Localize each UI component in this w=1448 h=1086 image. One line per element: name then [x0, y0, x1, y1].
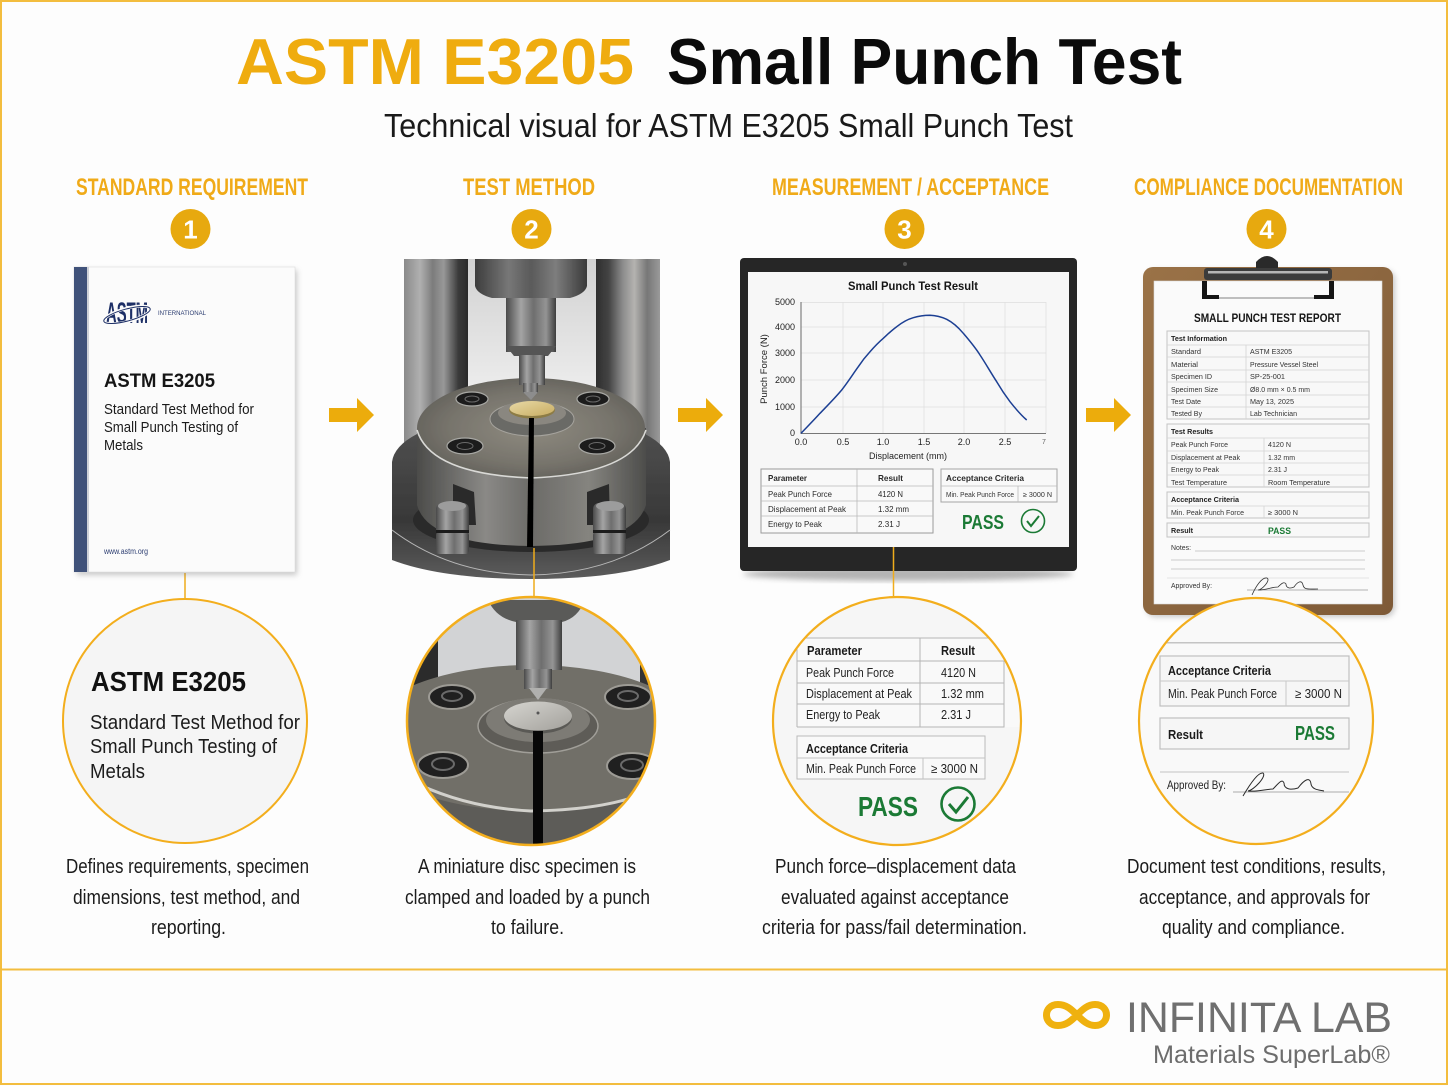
book: standard document: INTERNATIONAL [158, 310, 206, 317]
book: standard document: Standard Test Method for [104, 402, 254, 418]
result table: 1.32 mm [878, 504, 909, 514]
line chart: punch force vs displacement: 0.0 [795, 437, 807, 447]
result table: 2.31 J [878, 519, 900, 529]
zoomed approval signature: Approved By: [1167, 780, 1226, 792]
notes and approval: Approved By: [1171, 583, 1212, 590]
detail circle: standard title: Small Punch Testing of [90, 736, 277, 758]
table: test information: ASTM E3205 [1250, 349, 1292, 356]
line chart: punch force vs displacement: 1000 [775, 402, 795, 412]
book: standard document: ASTM E3205 [104, 371, 215, 392]
line chart: punch force vs displacement: 2.0 [958, 437, 970, 447]
table: test results: Room Temperature [1268, 480, 1330, 487]
table: test information: Standard [1171, 349, 1201, 356]
clamp body [417, 428, 646, 546]
notes and approval: Notes: [1171, 545, 1191, 552]
detail circle: standard title: Metals [90, 761, 145, 783]
line chart: punch force vs displacement: Displacement (mm) [869, 451, 947, 462]
zoomed result box: PASS [1295, 723, 1335, 745]
description 2 [405, 856, 650, 939]
zoomed result box [1160, 718, 1349, 749]
acceptance criteria table: Min. Peak Punch Force [946, 492, 1014, 499]
title: Small Punch Test [667, 25, 1182, 98]
zoomed acceptance table: ≥ 3000 N [931, 762, 978, 776]
connector line [184, 573, 186, 598]
description 1: Defines requirements, specimen [66, 856, 309, 878]
table: test results: Test Temperature [1171, 480, 1227, 487]
table: test information [1167, 331, 1369, 419]
table: test results: 1.32 mm [1268, 455, 1295, 462]
column 1: standard requirement [63, 174, 309, 939]
step number 1 [170, 209, 210, 249]
line chart: punch force vs displacement: 2000 [775, 375, 795, 385]
punch [475, 259, 587, 400]
connector line [533, 548, 535, 598]
chart title: Small Punch Test Result [848, 279, 978, 293]
detail circle: standard title: ASTM E3205 [91, 666, 246, 697]
table: test results: 4120 N [1268, 442, 1291, 449]
column 3: measurement and acceptance [740, 174, 1077, 939]
zoomed result box: Result [1168, 728, 1204, 742]
table: acceptance criteria [1167, 492, 1369, 518]
heading: standard requirement: STANDARD REQUIREMENT [76, 174, 308, 201]
line chart: punch force vs displacement: 2.5 [999, 437, 1011, 447]
zoomed acceptance table: Acceptance Criteria [1168, 664, 1272, 678]
zoomed acceptance table [797, 736, 985, 779]
zoomed result table: Displacement at Peak [806, 687, 913, 701]
description 1 [66, 856, 309, 939]
zoomed result table: 2.31 J [941, 708, 971, 722]
result table [761, 469, 933, 533]
description 2: to failure. [491, 917, 564, 939]
description 4: acceptance, and approvals for [1139, 887, 1370, 909]
zoomed acceptance table [1160, 656, 1349, 706]
acceptance criteria table: ≥ 3000 N [1023, 492, 1052, 499]
table: test information: SP-25-001 [1250, 374, 1285, 381]
description 4: quality and compliance. [1162, 917, 1345, 939]
monitor [740, 258, 1077, 581]
step number 2: 2 [524, 214, 539, 244]
description 4: Document test conditions, results, [1127, 856, 1386, 878]
description 3: criteria for pass/fail determination. [762, 917, 1027, 939]
table: result [1167, 523, 1369, 537]
step number 3: 3 [897, 214, 912, 244]
line chart: punch force vs displacement: Punch Force (N) [759, 334, 770, 404]
table: test information: Test Information [1171, 334, 1227, 343]
line chart: punch force vs displacement: 7 [1042, 439, 1046, 446]
description 1: dimensions, test method, and [73, 887, 300, 909]
table: test information: Lab Technician [1250, 411, 1297, 418]
detail circle: punch and specimen [406, 596, 656, 846]
zoomed acceptance table: Min. Peak Punch Force [1168, 687, 1277, 701]
line chart: punch force vs displacement: 0.5 [837, 437, 849, 447]
logo: Infinita Lab: Materials SuperLab® [1153, 1041, 1391, 1069]
table: test information: Specimen Size [1171, 387, 1218, 394]
table: test information: Material [1171, 362, 1198, 369]
description 3 [762, 856, 1027, 939]
zoomed result table: Peak Punch Force [806, 666, 894, 680]
title [236, 25, 1182, 98]
result table: Result [878, 473, 903, 483]
report title: SMALL PUNCH TEST REPORT [1194, 311, 1342, 325]
step number 4: 4 [1259, 214, 1274, 244]
column 2: test method [392, 178, 670, 934]
zoomed result table: Parameter [807, 644, 862, 658]
table: test results [1167, 424, 1369, 487]
table: test information: May 13, 2025 [1250, 399, 1294, 406]
description 3: evaluated against acceptance [781, 887, 1009, 909]
zoomed pass result [858, 788, 974, 822]
table: test results: Peak Punch Force [1171, 442, 1228, 449]
result table: Displacement at Peak [768, 504, 847, 514]
pass result with check icon [962, 510, 1044, 534]
line chart: punch force vs displacement: 1.5 [918, 437, 930, 447]
detail circle: standard title: Standard Test Method for [90, 712, 300, 734]
result table: Peak Punch Force [768, 489, 832, 499]
table: test information: Tested By [1171, 411, 1202, 418]
pass result with check icon: PASS [962, 512, 1004, 534]
table: acceptance criteria: Acceptance Criteria [1171, 495, 1240, 504]
table: test results: Displacement at Peak [1171, 455, 1241, 462]
line chart: punch force vs displacement: 0 [790, 428, 795, 438]
result table: Energy to Peak [768, 519, 823, 529]
zoomed pass result: PASS [858, 791, 918, 822]
book: standard document: Small Punch Testing of [104, 420, 239, 436]
test fixture photo illustration [392, 259, 670, 579]
book: standard document: www.astm.org [103, 547, 148, 556]
arrow 1 [329, 398, 374, 432]
acceptance criteria table [941, 469, 1057, 502]
line chart: punch force vs displacement: 1.0 [877, 437, 889, 447]
notes and approval [1167, 545, 1369, 595]
step number 2 [512, 209, 552, 249]
table: test information: Specimen ID [1171, 374, 1212, 381]
book: standard document [74, 267, 297, 575]
subtitle: Technical visual for ASTM E3205 Small Punch Test [384, 107, 1073, 144]
table: result: PASS [1268, 526, 1291, 536]
result table: Parameter [768, 473, 808, 483]
icon: ASTM logo [102, 297, 152, 330]
table: test information: Pressure Vessel Steel [1250, 362, 1318, 369]
table: test results: Test Results [1171, 427, 1213, 436]
heading: measurement / acceptance: MEASUREMENT / ACCEPTANCE [772, 174, 1049, 201]
table: test results: 2.31 J [1268, 467, 1287, 474]
description 1: reporting. [151, 917, 226, 939]
description 4 [1127, 856, 1386, 939]
bolts [447, 392, 615, 454]
slot [527, 418, 534, 547]
line chart: punch force vs displacement: 5000 [775, 297, 795, 307]
column 4: compliance documentation [1127, 174, 1403, 939]
description 2: A miniature disc specimen is [418, 856, 636, 878]
line chart: punch force vs displacement: 4000 [775, 322, 795, 332]
zoomed result table [797, 638, 1030, 727]
icon: infinity symbol [1046, 1004, 1106, 1026]
title: ASTM E3205 [236, 25, 634, 98]
step number 1: 1 [183, 214, 198, 244]
icon: ASTM logo: ASTM [106, 297, 148, 330]
heading: test method: TEST METHOD [463, 174, 595, 201]
machine columns [404, 259, 660, 449]
zoomed result table: 4120 N [941, 666, 976, 680]
zoomed acceptance table: Acceptance Criteria [806, 742, 909, 756]
clamp top plate [417, 378, 646, 478]
zoomed acceptance table: Min. Peak Punch Force [806, 762, 916, 776]
step number 3 [884, 209, 924, 249]
line chart: punch force vs displacement [759, 297, 1046, 462]
table: acceptance criteria: Min. Peak Punch Force [1171, 510, 1244, 517]
connector line [892, 547, 894, 598]
logo: Infinita Lab: INFINITA LAB [1126, 994, 1392, 1042]
table: test results: Energy to Peak [1171, 467, 1219, 474]
line chart: punch force vs displacement: 3000 [775, 348, 795, 358]
table: result: Result [1171, 526, 1193, 535]
table: test information: Ø8.0 mm × 0.5 mm [1250, 387, 1310, 394]
machine base [392, 434, 670, 579]
description 2: clamped and loaded by a punch [405, 887, 650, 909]
detail circle: acceptance and approval [1130, 598, 1373, 844]
zoomed result table: Energy to Peak [806, 708, 881, 722]
zoomed result table: 1.32 mm [941, 687, 984, 701]
detail circle: result tables [773, 597, 1030, 845]
description 3: Punch force–displacement data [775, 856, 1017, 878]
step number 4 [1246, 209, 1286, 249]
specimen seat and disc [490, 401, 574, 436]
acceptance criteria table: Acceptance Criteria [946, 473, 1024, 483]
clipboard report [1143, 256, 1395, 617]
detail circle: standard title [63, 599, 307, 843]
result table: 4120 N [878, 489, 903, 499]
table: acceptance criteria: ≥ 3000 N [1268, 510, 1298, 517]
arrow 3 [1086, 398, 1131, 432]
zoomed acceptance table: ≥ 3000 N [1295, 687, 1342, 701]
side clamps [436, 484, 626, 554]
table: test information: Test Date [1171, 399, 1201, 406]
logo: Infinita Lab [1046, 994, 1392, 1069]
arrow 2 [678, 398, 723, 432]
icon: metal clip [1202, 256, 1334, 299]
zoomed result table: Result [941, 644, 976, 658]
zoomed approval signature [1160, 772, 1349, 796]
book: standard document: Metals [104, 438, 143, 454]
